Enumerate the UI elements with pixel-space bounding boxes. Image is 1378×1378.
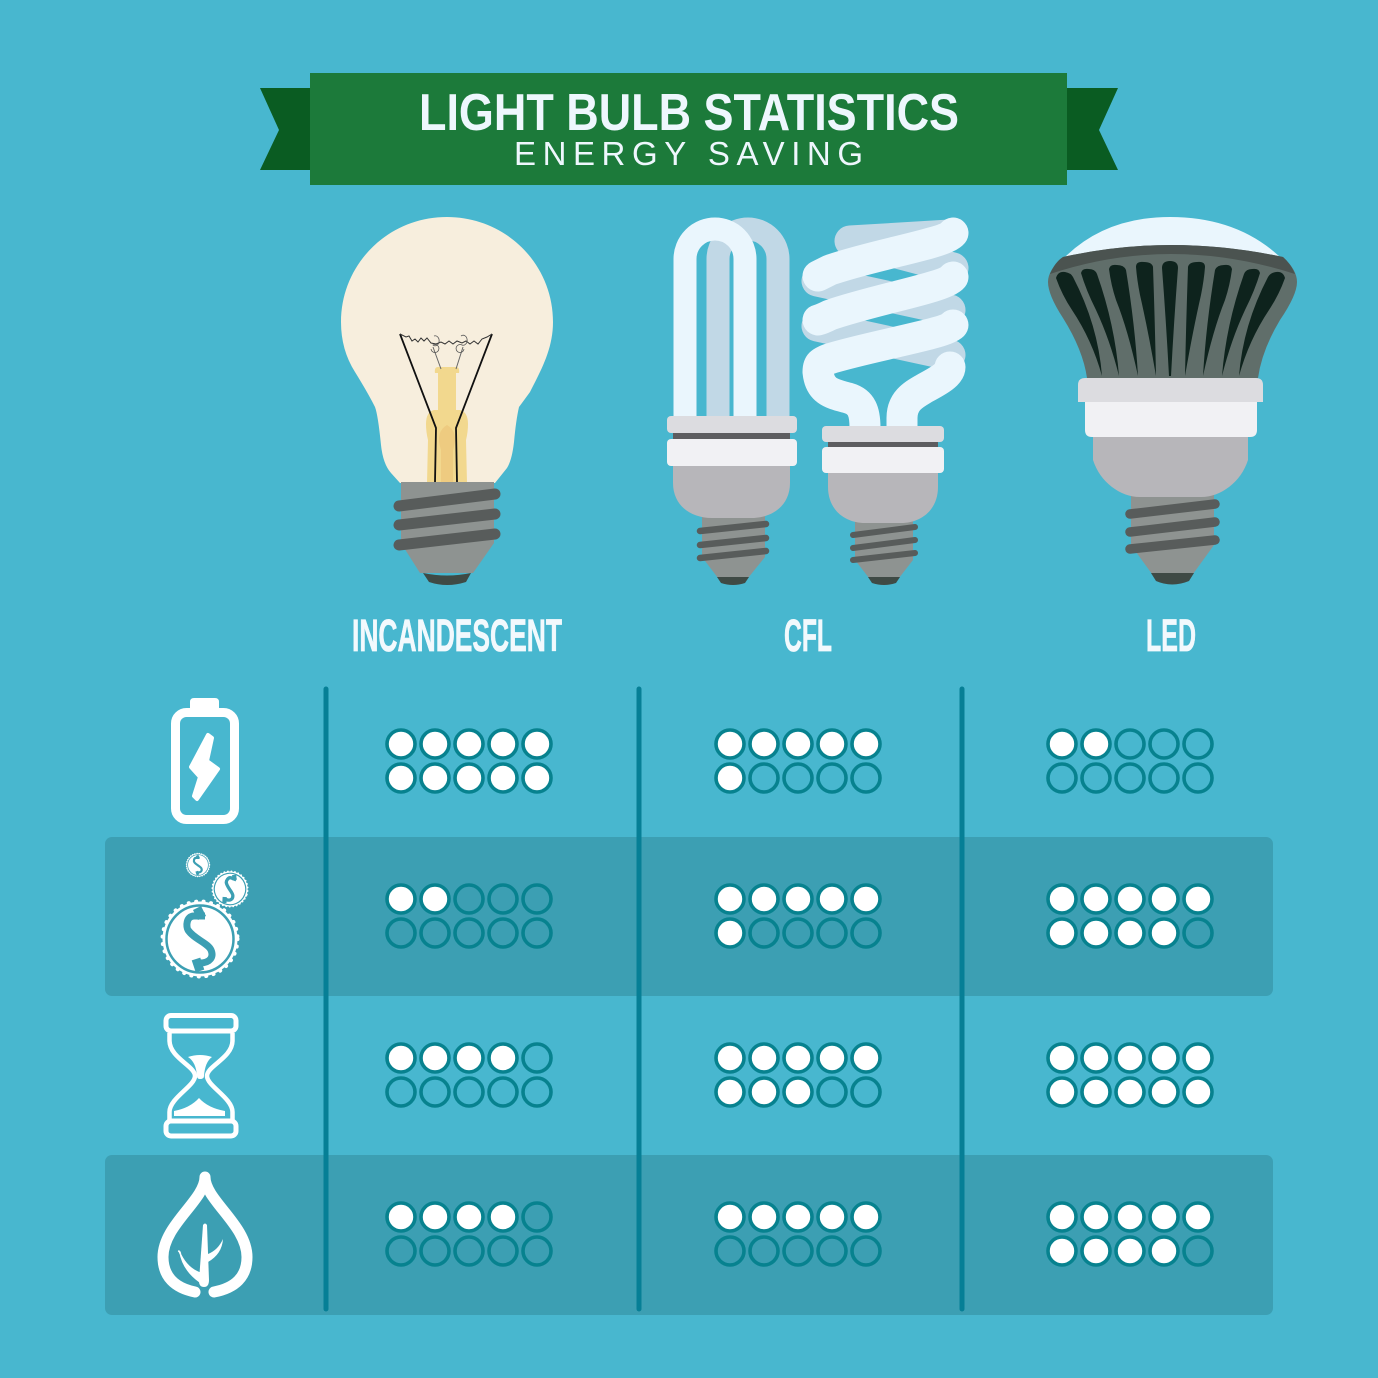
- screw thread: [700, 524, 766, 558]
- CFL spiral bulb illustration: [817, 233, 953, 585]
- contact tip: [423, 573, 471, 585]
- rating: cost, CFL: [716, 885, 880, 947]
- screw base: [702, 516, 765, 578]
- inner stem: [439, 425, 455, 483]
- back tube: [718, 229, 778, 417]
- rating: capacity, incandescent: [387, 730, 551, 792]
- rating: capacity, LED: [1048, 730, 1212, 792]
- screw thread: [853, 527, 915, 560]
- screw base: [1131, 495, 1214, 574]
- column label: LED: LED: [1146, 610, 1196, 661]
- back coil: [817, 235, 953, 355]
- rating: lifespan, LED: [1048, 1044, 1212, 1106]
- rating: eco, LED: [1048, 1203, 1212, 1265]
- support wires: [433, 347, 463, 369]
- screw base: [855, 520, 913, 578]
- CFL U-tube bulb illustration: [667, 229, 797, 585]
- collar groove: [673, 433, 790, 439]
- table row band: eco: [105, 1155, 1273, 1315]
- lower body: [1093, 437, 1248, 497]
- banner left tail: [260, 88, 311, 170]
- large coin: [162, 902, 238, 976]
- glass stem: [426, 367, 468, 483]
- rating: cost, LED: [1048, 885, 1212, 947]
- icon: hourglass: [166, 1016, 236, 1136]
- heat sink: [1048, 245, 1297, 378]
- contact tip: [868, 577, 900, 585]
- collar groove: [828, 442, 938, 447]
- cooling fins: [1056, 261, 1285, 376]
- subtitle: ENERGY SAVING: [514, 135, 863, 172]
- rating: eco, incandescent: [387, 1203, 551, 1265]
- diffuser dome: [1064, 217, 1281, 258]
- icon: coins: [162, 853, 253, 976]
- rating: capacity, CFL: [716, 730, 880, 792]
- ballast body: [828, 473, 938, 523]
- rating: cost, incandescent: [387, 885, 551, 947]
- collar bottom: [822, 447, 944, 473]
- rating: eco, CFL: [716, 1203, 880, 1265]
- contact tip: [717, 577, 749, 585]
- small coin: [186, 853, 210, 877]
- filament loops: [431, 335, 467, 352]
- collar bottom: [1085, 400, 1257, 437]
- front tube: [685, 229, 745, 417]
- medium coin: [207, 866, 253, 912]
- collar top: [822, 426, 944, 442]
- icon: leaf: [163, 1177, 247, 1292]
- lead wires: [400, 334, 492, 482]
- collar bottom: [667, 439, 797, 466]
- screw thread: [1130, 504, 1215, 549]
- glass globe: [341, 217, 553, 483]
- LED bulb illustration: [1048, 217, 1297, 584]
- rating: lifespan, CFL: [716, 1044, 880, 1106]
- heat sink rim: [1050, 245, 1295, 274]
- ballast body: [673, 466, 790, 518]
- icon: battery: [176, 698, 234, 820]
- banner body: [310, 73, 1067, 185]
- rating: lifespan, incandescent: [387, 1044, 551, 1106]
- column label: CFL: CFL: [784, 610, 832, 661]
- column dividers: [326, 689, 962, 1309]
- collar top: [1078, 378, 1263, 402]
- screw base: [401, 482, 494, 573]
- screw thread: [399, 494, 495, 545]
- banner right tail: [1067, 88, 1118, 170]
- table row band: cost: [105, 837, 1273, 996]
- title banner: [260, 73, 1118, 185]
- title: LIGHT BULB STATISTICS: [419, 84, 959, 142]
- column label: incandescent: INCANDESCENT: [352, 610, 562, 661]
- contact tip: [1151, 573, 1194, 584]
- incandescent bulb illustration: [341, 217, 553, 585]
- filament: [400, 334, 492, 344]
- front coil: [818, 233, 953, 428]
- collar top: [667, 416, 797, 433]
